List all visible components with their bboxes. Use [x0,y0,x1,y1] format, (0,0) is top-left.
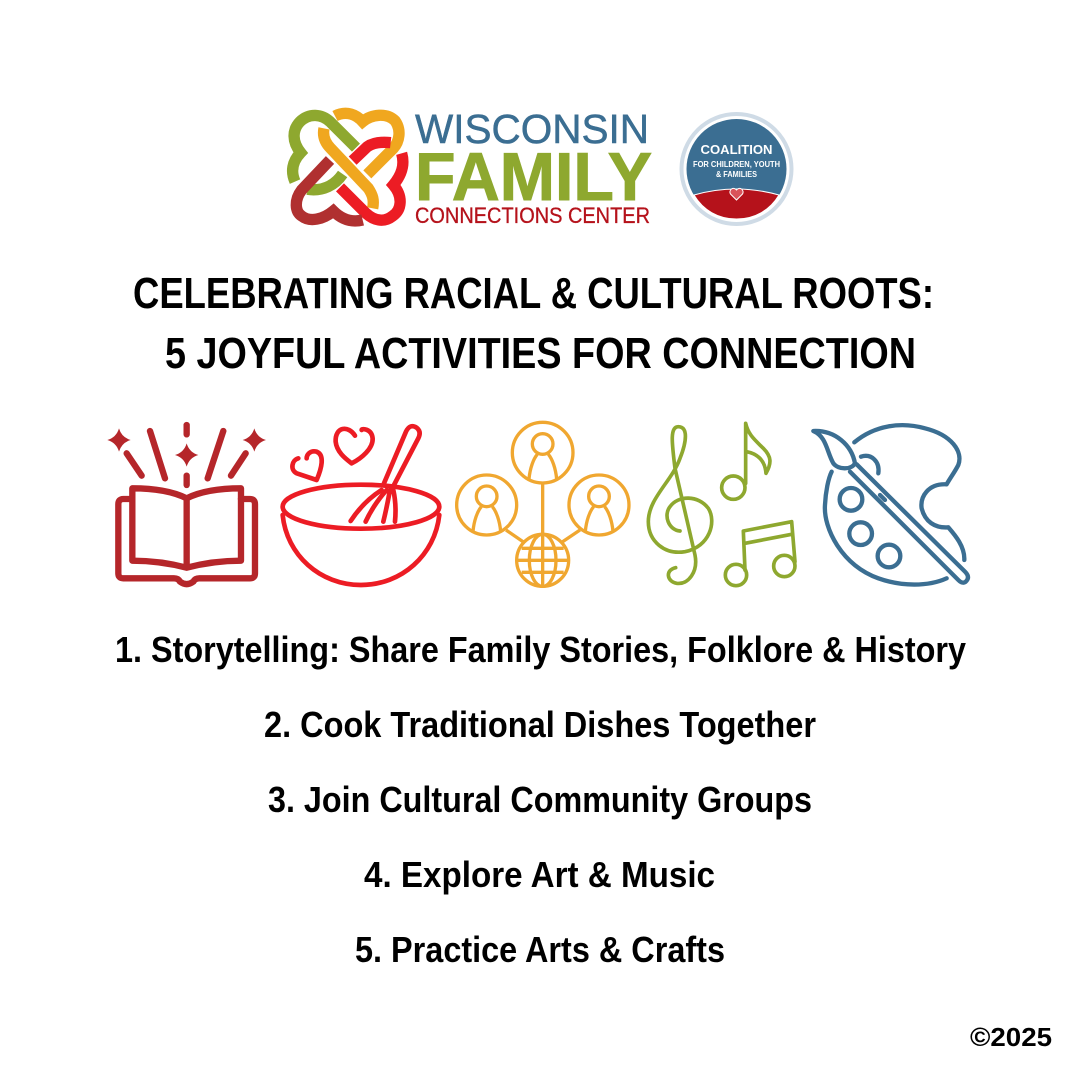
badge text: & families: & FAMILIES [716,170,758,179]
badge text: for children, youth: FOR CHILDREN, YOUTH [693,160,780,169]
list item 5: 5. Practice Arts & Crafts [355,929,725,970]
title: 5 JOYFUL ACTIVITIES FOR CONNECTION [165,329,916,378]
badge: Coalition for Children, Youth & Families [682,114,792,224]
title: CELEBRATING RACIAL & CULTURAL ROOTS: [133,269,934,318]
list item 3: 3. Join Cultural Community Groups [268,779,812,820]
activity list [115,629,966,970]
icon: treble clef and music notes [648,423,795,586]
list item 1: 1. Storytelling: Share Family Stories, Folklore & History [115,629,966,670]
list item 2: 2. Cook Traditional Dishes Together [264,704,816,745]
list item 4: 4. Explore Art & Music [364,854,715,895]
icon: artist palette and brush [813,425,968,585]
copyright: ©2025 [970,1022,1052,1052]
badge text: Coalition: COALITION [700,143,772,157]
icon: mixing bowl with whisk and hearts [283,426,439,585]
logo text: Family: FAMILY [415,139,652,215]
logo text: Connections Center: CONNECTIONS CENTER [415,203,650,228]
icon: open book with sparkles [107,425,266,584]
icon: people connected to globe [457,422,629,586]
title [133,269,934,378]
logo text: Wisconsin: WISCONSIN [415,106,649,152]
logo: Wisconsin Family Connections Center [293,106,652,228]
icon: interlocking hearts knot [293,113,403,221]
